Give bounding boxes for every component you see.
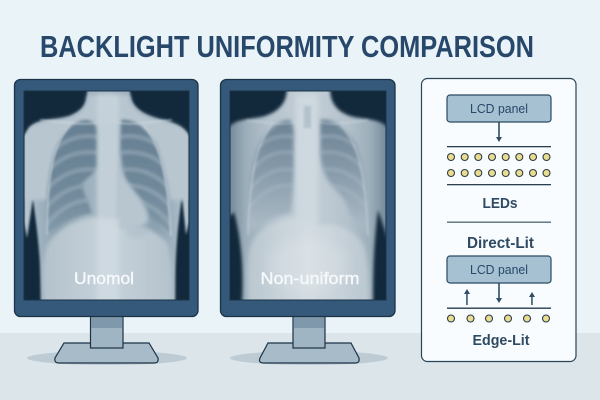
spine — [94, 94, 122, 222]
diaphragm dome — [247, 218, 369, 303]
edge-lit LED array — [447, 308, 551, 322]
floor — [0, 333, 600, 400]
stand base — [260, 343, 359, 363]
x-ray image: non-uniform — [228, 88, 388, 303]
heart — [120, 172, 150, 228]
screen outline — [230, 91, 386, 300]
lungs — [47, 120, 170, 233]
shoulders — [25, 95, 188, 200]
monitor: uniform — [14, 80, 198, 365]
label: Edge-Lit: Edge-Lit — [472, 332, 530, 349]
panel card — [422, 78, 576, 362]
stand shadow — [230, 351, 388, 365]
diaphragm dome — [42, 217, 173, 303]
x-ray image: uniform — [24, 88, 189, 303]
label: Direct-Lit: Direct-Lit — [467, 235, 534, 252]
monitor frame — [220, 80, 395, 316]
stand neck — [90, 317, 123, 348]
label: LEDs: LEDs — [482, 195, 518, 212]
arrows: edge-lit — [464, 283, 535, 305]
ribs — [47, 133, 169, 225]
spine — [294, 96, 320, 223]
stand base — [55, 343, 158, 363]
monitor: non-uniform — [220, 80, 395, 365]
body silhouette — [24, 88, 189, 303]
arrow: direct-lit down — [496, 122, 502, 142]
panel: backlight diagrams — [422, 78, 576, 362]
direct-lit LCD panel — [447, 95, 551, 122]
edge-lit LCD panel: LCD panel — [470, 263, 528, 277]
label: Non-uniform: Non-uniform — [260, 270, 360, 288]
direct-lit LCD panel: LCD panel — [470, 102, 528, 116]
ribs — [254, 134, 362, 194]
central glow — [278, 258, 282, 272]
direct-lit LED array — [447, 146, 551, 185]
lungs — [250, 117, 364, 220]
stand shadow — [27, 351, 187, 365]
screen outline — [24, 91, 189, 300]
monitor frame — [14, 80, 198, 316]
rib cage edges — [246, 120, 368, 236]
edge-lit LCD panel — [447, 256, 551, 283]
stand neck — [293, 317, 325, 348]
body silhouette — [228, 88, 388, 303]
collarbones and rib cage edges — [40, 120, 172, 236]
label: Unomol: Unomol — [74, 270, 134, 288]
